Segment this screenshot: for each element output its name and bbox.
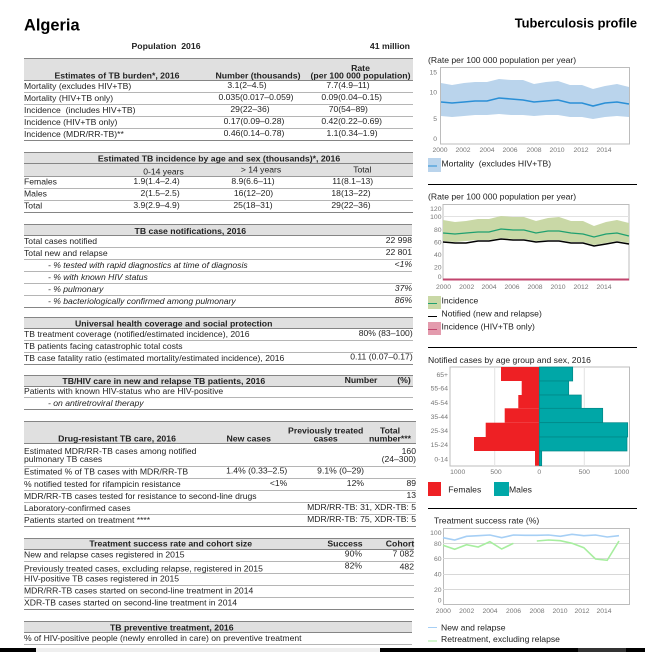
panel: treatment success rate table: HIV-positive TB cases registered in 2015	[24, 574, 179, 584]
legend: incidence and notifications: Incidence	[442, 296, 479, 306]
panel: drug-resistant TB care table: New cases	[226, 434, 271, 444]
panel: drug-resistant TB care table: Estimated MDR/RR-TB cases among notified	[24, 446, 197, 456]
chart: mortality rate: 2010	[549, 147, 565, 154]
chart: incidence and notifications rate: 120	[430, 206, 442, 213]
panel: estimates of TB burden table: 0.17(0.09–0.28)	[224, 116, 284, 126]
panel: drug-resistant TB care table: <1%	[270, 478, 288, 488]
panel: estimates of TB burden table: Estimates of TB burden*, 2016	[54, 70, 180, 80]
panel: TB/HIV care table: (%)	[397, 375, 411, 385]
chart: treatment success rate	[430, 516, 630, 615]
panel: TB incidence by age and sex table: 0-14 years	[143, 167, 184, 177]
panel: TB/HIV care table: - on antiretroviral therapy	[48, 398, 144, 408]
panel: treatment success rate table	[24, 538, 414, 610]
legend: incidence and notifications: Incidence (HIV+TB only)	[442, 322, 535, 332]
panel: drug-resistant TB care table: cases	[314, 434, 338, 444]
panel: treatment success rate table: 7 082	[392, 549, 414, 559]
panel: drug-resistant TB care table: Drug-resistant TB care, 2016	[58, 434, 176, 444]
population line	[132, 41, 410, 51]
chart: notified cases population pyramid: Notified cases by age group and sex, 2016	[428, 355, 591, 365]
chart: notified cases population pyramid: 35-44	[431, 414, 448, 421]
chart: incidence and notifications rate: 100	[430, 214, 442, 221]
panel: TB incidence by age and sex table: Females	[24, 177, 57, 187]
panel: TB incidence by age and sex table: 25(18–31)	[233, 200, 273, 210]
panel: TB case notifications table: 22 998	[386, 235, 412, 245]
panel: TB incidence by age and sex table: Estimated TB incidence by age and sex (thousands)*, 2016	[98, 154, 340, 164]
panel: TB case notifications table: <1%	[395, 259, 412, 269]
panel: drug-resistant TB care table: 160	[402, 446, 416, 456]
chart: incidence and notifications rate: 0	[438, 274, 442, 281]
panel: TB case notifications table: - % pulmonary	[48, 284, 104, 294]
chart: mortality rate: 2004	[479, 147, 495, 154]
chart: treatment success rate: 2002	[459, 608, 474, 615]
panel: drug-resistant TB care table	[24, 421, 416, 526]
chart: notified cases population pyramid: 65+	[436, 372, 448, 379]
panel: estimates of TB burden table: Incidence (HIV+TB only)	[24, 117, 118, 127]
chart: incidence and notifications rate	[428, 192, 629, 291]
panel: TB/HIV care table: Patients with known HIV-status who are HIV-positive	[24, 386, 223, 396]
chart: mortality rate: 2012	[573, 147, 589, 154]
chart: treatment success rate: 2004	[482, 608, 498, 615]
chart: treatment success rate: 100	[430, 530, 442, 537]
panel: TB case notifications table: 86%	[395, 295, 412, 305]
panel: universal health coverage table: TB patients facing catastrophic total costs	[24, 341, 183, 351]
panel: universal health coverage table: Universal health coverage and social protection	[75, 319, 272, 329]
chart: incidence and notifications rate: 2010	[550, 284, 566, 291]
panel: TB incidence by age and sex table: 11(8.1–13)	[332, 176, 373, 186]
panel: TB case notifications table: - % tested with rapid diagnostics at time of diagnosis	[48, 260, 248, 270]
panel: TB incidence by age and sex table	[24, 152, 413, 212]
panel: TB/HIV care table: TB/HIV care in new and relapse TB patients, 2016	[62, 376, 265, 386]
chart: treatment success rate: 2008	[529, 608, 545, 615]
panel: universal health coverage table: TB treatment coverage (notified/estimated incidence), 2016	[24, 329, 250, 339]
chart: notified cases population pyramid: 25-34	[431, 428, 448, 435]
chart: treatment success rate: 2012	[574, 608, 590, 615]
panel: drug-resistant TB care table: (24–300)	[382, 454, 416, 464]
panel: estimates of TB burden table: 0.42(0.22–0.69)	[321, 116, 382, 126]
panel: treatment success rate table: XDR-TB cases started on second-line treatment in 2014	[24, 598, 237, 608]
panel: TB incidence by age and sex table: Males	[24, 189, 47, 199]
chart: treatment success rate: 60	[434, 556, 442, 563]
chart: incidence and notifications rate: 60	[434, 240, 442, 246]
panel: TB case notifications table: 22 801	[386, 247, 412, 257]
panel: universal health coverage table: TB case fatality ratio (estimated mortality/estimated incidence), 2016	[24, 353, 285, 363]
panel: drug-resistant TB care table: 12%	[347, 478, 364, 488]
legend: mortality: Mortality (excludes HIV+TB)	[442, 159, 551, 169]
panel: universal health coverage table: 80% (83–100)	[359, 328, 413, 338]
panel: treatment success rate table: 82%	[345, 561, 362, 571]
chart: mortality rate: 10	[429, 90, 437, 96]
chart: notified cases population pyramid: 1000	[614, 469, 629, 476]
panel: drug-resistant TB care table: % notified tested for rifampicin resistance	[24, 479, 181, 489]
chart: mortality rate: 0	[433, 136, 437, 143]
panel: drug-resistant TB care table: Estimated % of TB cases with MDR/RR-TB	[24, 467, 188, 477]
chart: incidence and notifications rate: 80	[434, 227, 442, 234]
legend: females and males: Males	[509, 485, 532, 495]
panel: estimates of TB burden table: 70(54–89)	[329, 104, 368, 114]
panel: treatment success rate table: Treatment success rate and cohort size	[89, 538, 252, 548]
chart: mortality rate: (Rate per 100 000 population per year)	[428, 55, 576, 65]
panel: estimates of TB burden table: Incidence (MDR/RR-TB)**	[24, 129, 124, 139]
panel: TB case notifications table: - % bacteriologically confirmed among pulmonary	[48, 296, 236, 306]
chart: incidence and notifications rate: 2006	[504, 284, 520, 291]
panel: estimates of TB burden table	[24, 58, 413, 140]
panel: drug-resistant TB care table: 13	[406, 490, 416, 500]
panel: drug-resistant TB care table: 9.1% (0–29)	[317, 466, 364, 476]
legend: females and males	[428, 482, 532, 496]
title: country name: Algeria	[24, 16, 80, 34]
chart: incidence and notifications rate: 20	[434, 264, 442, 272]
panel: TB incidence by age and sex table: 29(22–36)	[331, 200, 371, 210]
chart: treatment success rate: 40	[434, 572, 442, 578]
chart: notified cases population pyramid	[428, 355, 630, 476]
panel: treatment success rate table: 482	[400, 562, 414, 572]
panel: estimates of TB burden table: 1.1(0.34–1.9)	[326, 128, 378, 138]
chart: incidence and notifications rate: 2004	[481, 284, 497, 291]
chart: treatment success rate: 80	[434, 541, 442, 548]
title: tuberculosis profile: Tuberculosis profile	[515, 16, 637, 30]
panel: TB incidence by age and sex table: > 14 years	[241, 165, 281, 175]
panel: estimates of TB burden table: Mortality (excludes HIV+TB)	[24, 81, 131, 91]
panel: drug-resistant TB care table: pulmonary TB cases	[24, 454, 102, 464]
bars: males	[539, 367, 628, 466]
panel: treatment success rate table: New and relapse cases registered in 2015	[24, 550, 185, 560]
chart: mortality rate: 15	[429, 70, 437, 76]
chart: notified cases population pyramid: 0-14	[434, 457, 448, 464]
chart: treatment success rate: 2014	[596, 608, 612, 615]
panel: estimates of TB burden table: Mortality (HIV+TB only)	[24, 93, 113, 103]
panel: estimates of TB burden table: 0.46(0.14–0.78)	[224, 128, 284, 138]
panel: estimates of TB burden table: 0.09(0.04–0.15)	[321, 92, 382, 102]
panel: TB incidence by age and sex table: 8.9(6.6–11)	[231, 176, 275, 186]
chart: treatment success rate: 2010	[552, 608, 568, 615]
legend: treatment success: Retreatment, excluding relapse	[441, 634, 560, 644]
chart: treatment success rate: 2006	[506, 608, 521, 615]
panel: estimates of TB burden table: Incidence (includes HIV+TB)	[24, 105, 136, 115]
panel: estimates of TB burden table: 3.1(2–4.5)	[227, 80, 267, 90]
panel: TB incidence by age and sex table: 2(1.5–2.5)	[141, 188, 180, 198]
chart: mortality rate: 2002	[455, 147, 471, 154]
chart: treatment success rate: 20	[434, 587, 442, 594]
chart: incidence and notifications rate: 2000	[436, 284, 451, 291]
panel: treatment success rate table: Success	[327, 538, 363, 548]
panel: drug-resistant TB care table: Total	[380, 426, 400, 436]
panel: treatment success rate table: MDR/RR-TB cases started on second-line treatment in 2014	[24, 586, 253, 596]
legend: incidence and notifications: Notified (new and relapse)	[442, 309, 542, 319]
chart: mortality rate: 2006	[502, 147, 518, 154]
panel: TB incidence by age and sex table: 1.9(1.4–2.4)	[133, 176, 180, 186]
legend: treatment success: New and relapse	[441, 623, 506, 633]
panel: TB preventive treatment table: % of HIV-positive people (newly enrolled in care) on preventive treatment	[24, 633, 302, 643]
panel: TB preventive treatment table	[24, 621, 412, 644]
chart: notified cases population pyramid: 45-54	[431, 400, 448, 407]
panel: estimates of TB burden table: Number (thousands)	[216, 70, 301, 80]
panel: drug-resistant TB care table: 1.4% (0.33–2.5)	[226, 466, 287, 476]
footer bar	[0, 648, 645, 652]
panel: drug-resistant TB care table: Laboratory-confirmed cases	[24, 503, 131, 513]
population line: Population 2016	[132, 41, 201, 51]
panel: TB preventive treatment table: TB preventive treatment, 2016	[110, 623, 234, 633]
chart: incidence and notifications rate: 2012	[573, 284, 589, 291]
panel: TB incidence by age and sex table: 3.9(2.9–4.9)	[133, 200, 180, 210]
chart: notified cases population pyramid: 500	[579, 469, 590, 476]
panel: drug-resistant TB care table: MDR/RR-TB: 31, XDR-TB: 5	[307, 502, 416, 512]
panel: treatment success rate table: Previously treated cases, excluding relapse, registered in 2015	[24, 564, 263, 574]
chart: treatment success rate: 2000	[436, 608, 451, 615]
chart: notified cases population pyramid: 55-64	[431, 386, 448, 393]
panel: estimates of TB burden table: 7.7(4.9–11)	[326, 80, 370, 90]
legend: mortality	[428, 158, 551, 172]
chart: mortality rate: 2000	[432, 147, 448, 154]
panel: drug-resistant TB care table: MDR/RR-TB: 75, XDR-TB: 5	[307, 514, 416, 524]
panel: TB case notifications table	[24, 224, 412, 308]
panel: estimates of TB burden table: 29(22–36)	[230, 104, 270, 114]
panel: TB case notifications table: TB case notifications, 2016	[135, 226, 246, 236]
chart: incidence and notifications rate: 2014	[596, 284, 612, 291]
panel: estimates of TB burden table: (per 100 000 population)	[311, 70, 411, 80]
chart: mortality rate: 2008	[526, 147, 542, 154]
panel: TB/HIV care table	[24, 375, 413, 410]
panel: universal health coverage table	[24, 317, 413, 364]
panel: TB case notifications table: 37%	[395, 283, 412, 293]
chart: mortality rate: 5	[433, 116, 437, 123]
chart: treatment success rate: Treatment success rate (%)	[434, 516, 539, 526]
chart: incidence and notifications rate: 40	[434, 252, 442, 259]
panel: TB case notifications table: Total cases notified	[24, 236, 97, 246]
panel: TB case notifications table: - % with known HIV status	[48, 272, 149, 282]
panel: treatment success rate table: 90%	[345, 549, 362, 559]
panel: TB incidence by age and sex table: 18(13–22)	[331, 188, 371, 198]
panel: TB incidence by age and sex table: Total	[353, 165, 371, 175]
panel: universal health coverage table: 0.11 (0.07–0.17)	[350, 352, 413, 362]
panel: treatment success rate table: Cohort	[386, 538, 414, 548]
chart: notified cases population pyramid: 15-24	[431, 442, 448, 449]
panel: drug-resistant TB care table: MDR/RR-TB cases tested for resistance to second-line drugs	[24, 491, 257, 501]
chart: mortality rate: 2014	[596, 147, 612, 154]
legend: treatment success	[428, 623, 560, 644]
chart: incidence and notifications rate: 2002	[459, 284, 474, 291]
chart: incidence and notifications rate: 2008	[527, 284, 543, 291]
panel: drug-resistant TB care table: number***	[369, 434, 412, 444]
legend: incidence and notifications	[428, 296, 542, 335]
chart: notified cases population pyramid: 0	[537, 469, 541, 476]
panel: TB/HIV care table: Number	[345, 375, 378, 385]
panel: drug-resistant TB care table: Previously treated	[288, 426, 363, 436]
chart: mortality rate	[428, 55, 630, 154]
chart: notified cases population pyramid: 500	[490, 469, 502, 476]
panel: estimates of TB burden table: Rate	[351, 63, 370, 73]
panel: TB incidence by age and sex table: 16(12–20)	[234, 188, 273, 198]
panel: drug-resistant TB care table: 89	[406, 478, 416, 488]
chart: notified cases population pyramid: 1000	[450, 469, 465, 476]
population line: 41 million	[370, 41, 410, 51]
panel: drug-resistant TB care table: Patients started on treatment ****	[24, 515, 151, 525]
bars: females	[474, 367, 539, 466]
panel: TB case notifications table: Total new and relapse	[24, 248, 108, 258]
chart: treatment success rate: 0	[438, 598, 442, 604]
panel: TB incidence by age and sex table: Total	[24, 201, 42, 211]
chart: incidence and notifications rate: (Rate per 100 000 population per year)	[428, 192, 576, 202]
panel: estimates of TB burden table: 0.035(0.017–0.059)	[218, 92, 294, 102]
legend: females and males: Females	[448, 485, 481, 495]
